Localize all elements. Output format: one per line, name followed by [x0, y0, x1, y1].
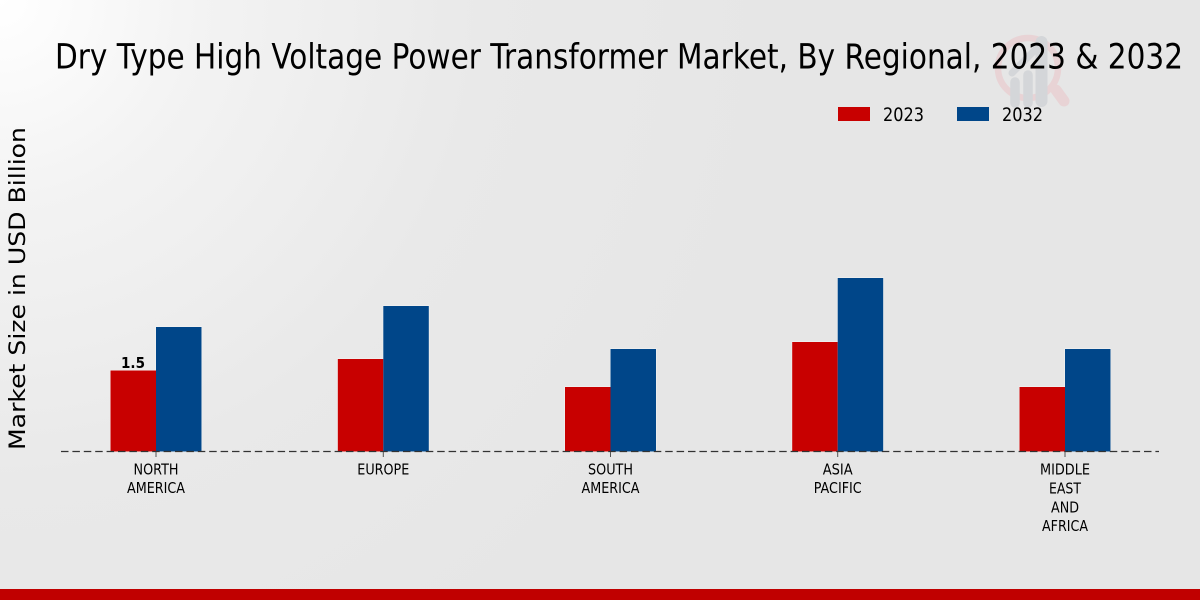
y axis label: Market Size in USD Billion — [5, 127, 31, 450]
bars: South America — [565, 349, 656, 452]
value label: 1.5: 1.5 — [121, 354, 145, 372]
legend item: 2032 — [957, 104, 1043, 126]
bars: Europe — [338, 306, 429, 452]
icon: magnifier watermark — [998, 38, 1064, 103]
bar chart — [61, 278, 1159, 457]
bars: Middle East and Africa — [1020, 349, 1110, 452]
label: Middle East and Africa: AND — [1051, 498, 1079, 516]
label: Asia Pacific: ASIA — [823, 461, 853, 479]
label: Middle East and Africa: EAST — [1049, 479, 1081, 497]
label: North America — [127, 461, 185, 497]
label: North America: NORTH — [134, 461, 178, 479]
footer bar — [0, 589, 1200, 600]
bars: North America — [110, 327, 202, 452]
label: North America: AMERICA — [127, 479, 185, 497]
label: Asia Pacific: PACIFIC — [814, 479, 862, 497]
label: South America: AMERICA — [582, 479, 640, 497]
legend item: 2023 — [838, 104, 924, 126]
label: Europe: EUROPE — [357, 461, 409, 479]
legend item: 2032: 2032 — [1002, 104, 1043, 126]
label: Middle East and Africa: AFRICA — [1042, 517, 1088, 535]
label: Middle East and Africa — [1040, 461, 1090, 535]
legend — [838, 104, 1043, 126]
label: South America: SOUTH — [588, 461, 633, 479]
bars: Asia Pacific — [792, 278, 883, 452]
legend item: 2023: 2023 — [883, 104, 924, 126]
label: South America — [582, 461, 640, 497]
label: Middle East and Africa: MIDDLE — [1040, 461, 1090, 479]
x axis labels — [127, 461, 1090, 535]
label: Asia Pacific — [814, 461, 862, 497]
